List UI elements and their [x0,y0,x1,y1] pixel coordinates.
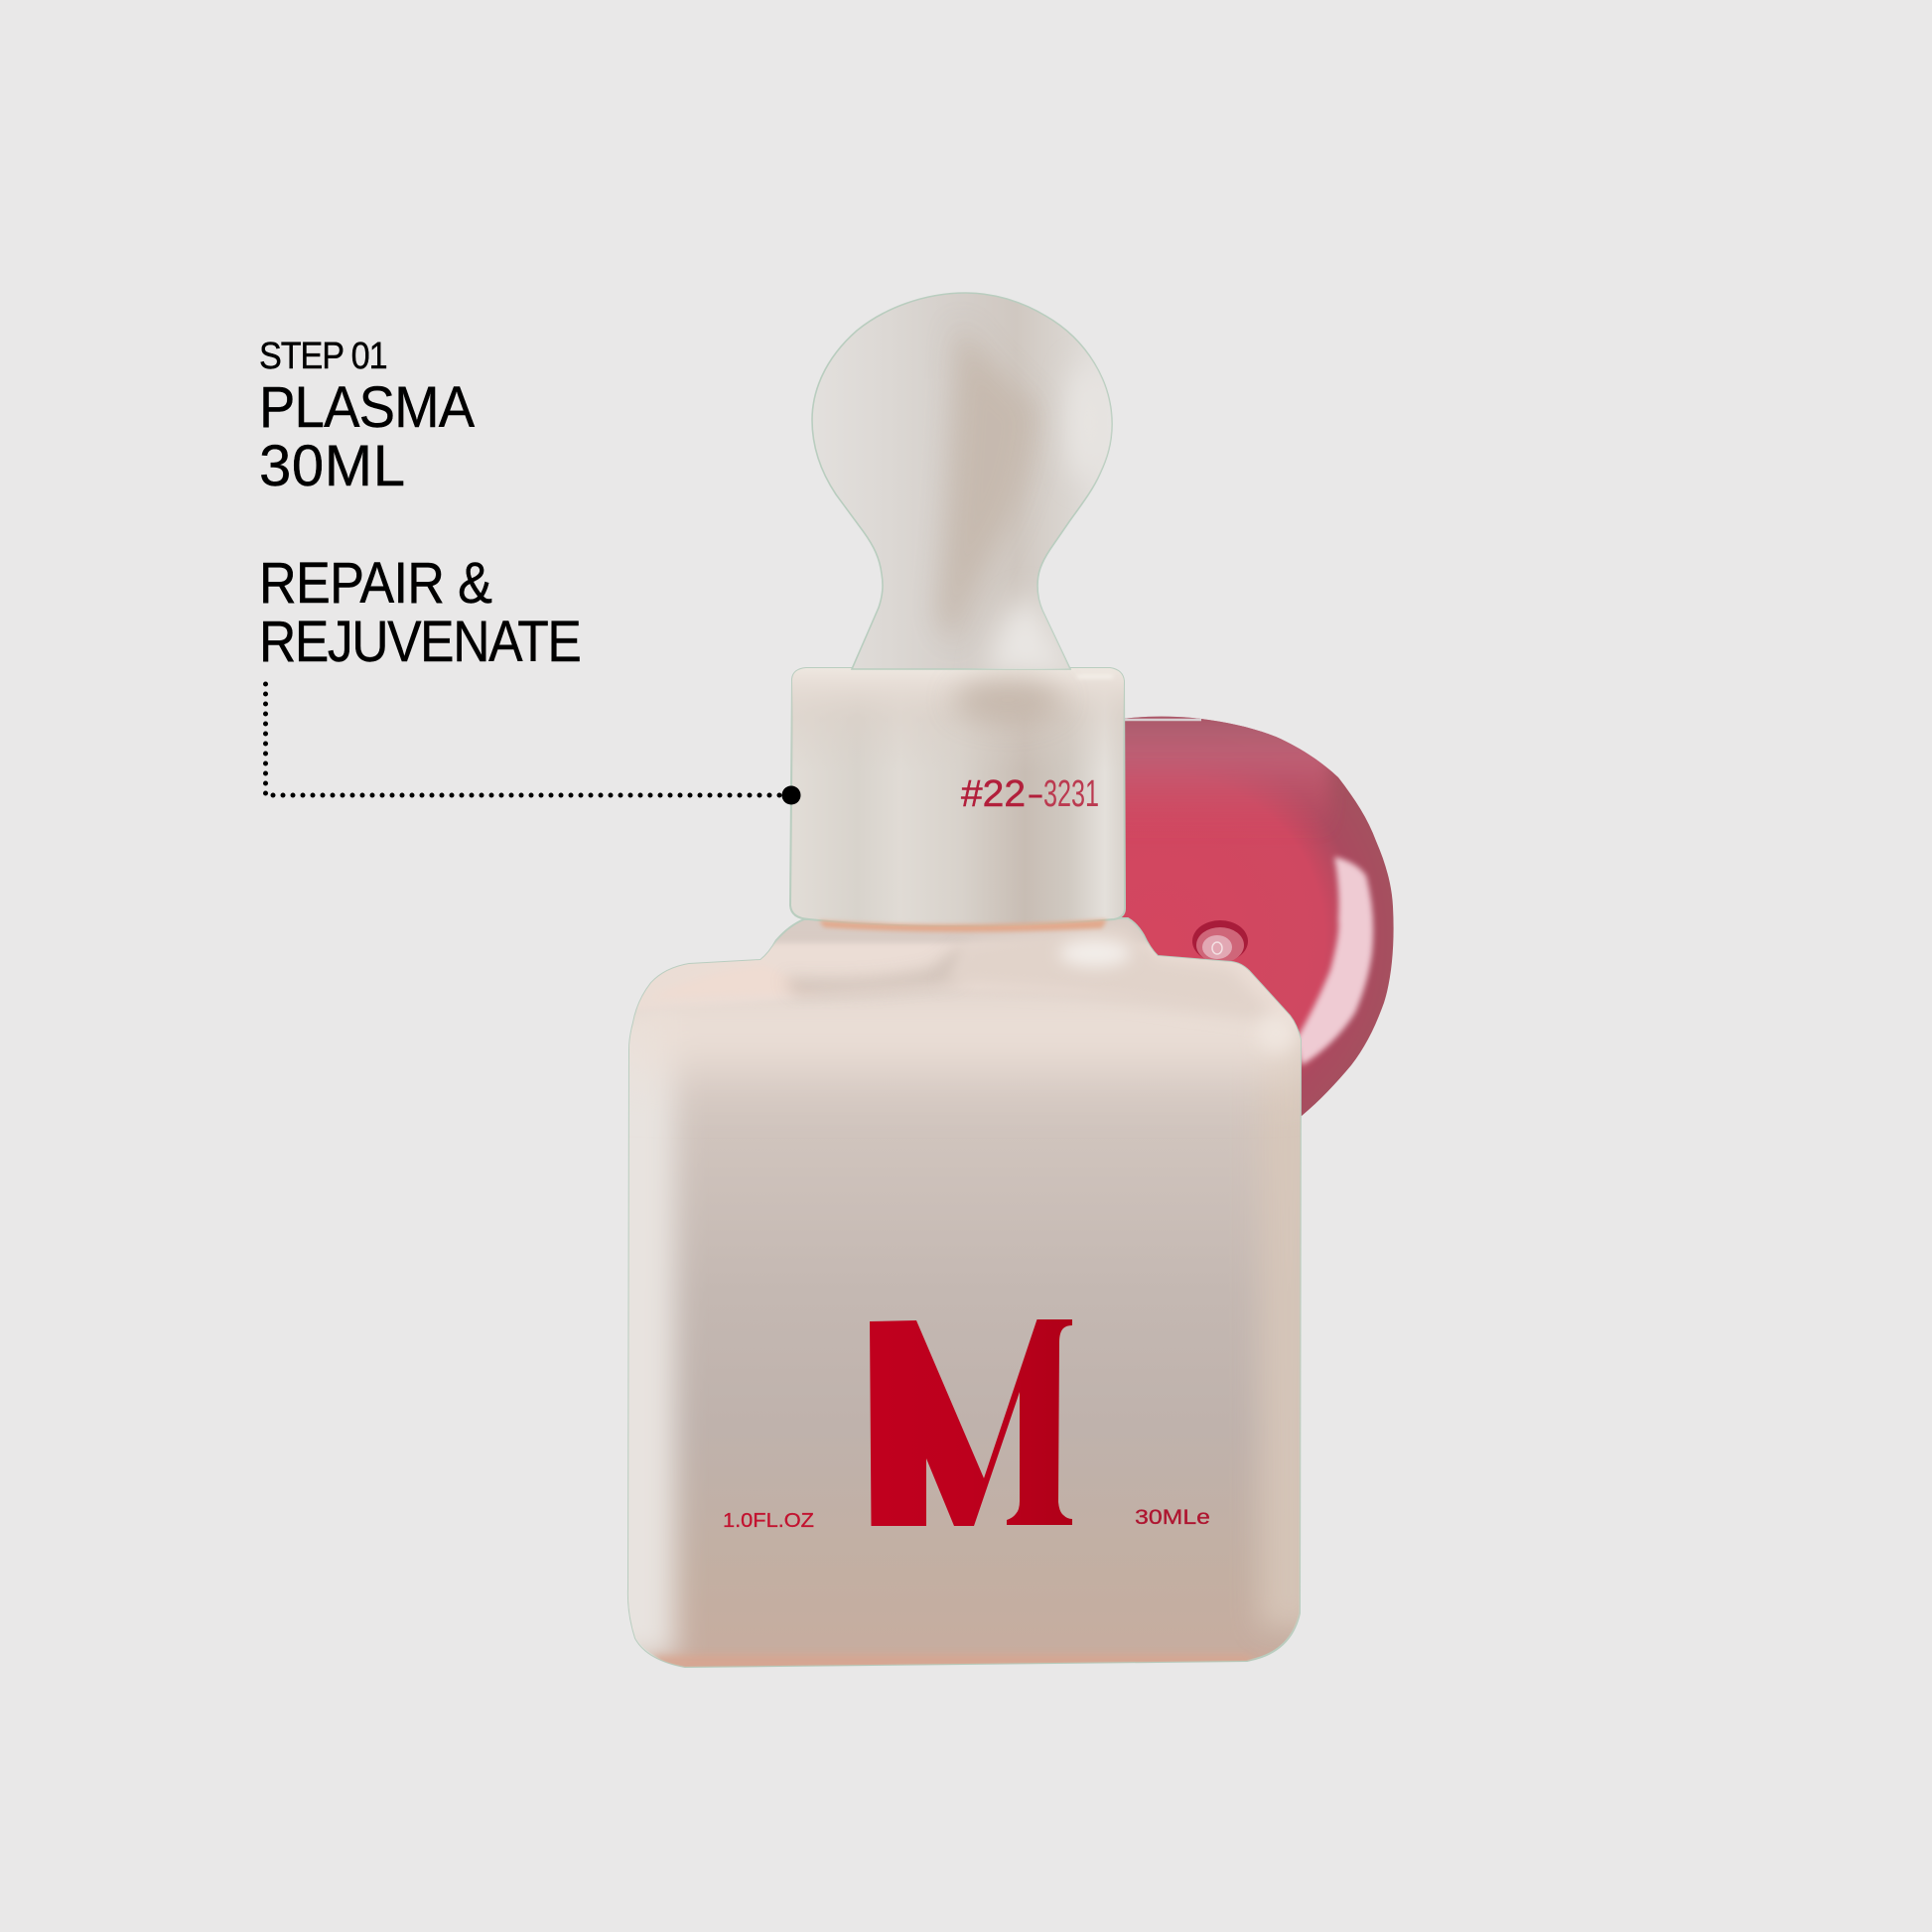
product name: PLASMA [259,374,476,439]
benefit line 2: REJUVENATE [259,609,582,674]
serum swatch blob [1122,717,1394,1116]
bottle body [596,918,1318,1670]
product infographic canvas [260,292,1394,1668]
bottle label 30 ml: 30MLe [1135,1506,1210,1529]
lit front-face bands [627,1015,690,1660]
batch number [961,773,1099,815]
bottle logo M [870,1319,1072,1526]
product volume: 30ML [259,434,405,498]
air bubble on swatch [1192,920,1248,963]
bottle label 1.0 fl oz: 1.0FL.OZ [723,1510,814,1532]
dropper collar cap [784,665,1132,933]
benefit line 1: REPAIR & [259,550,492,616]
batch number: - [1027,773,1044,815]
dotted callout connector [266,684,800,804]
step text block [259,334,582,674]
batch number: 3231 [1043,773,1099,815]
cap shadow [819,919,1107,932]
batch number: #22 [961,773,1026,815]
step number: STEP 01 [259,334,388,376]
neck fold shadow [784,943,968,995]
dropper bulb [812,293,1112,675]
shoulder above the ridge [637,941,1295,1023]
